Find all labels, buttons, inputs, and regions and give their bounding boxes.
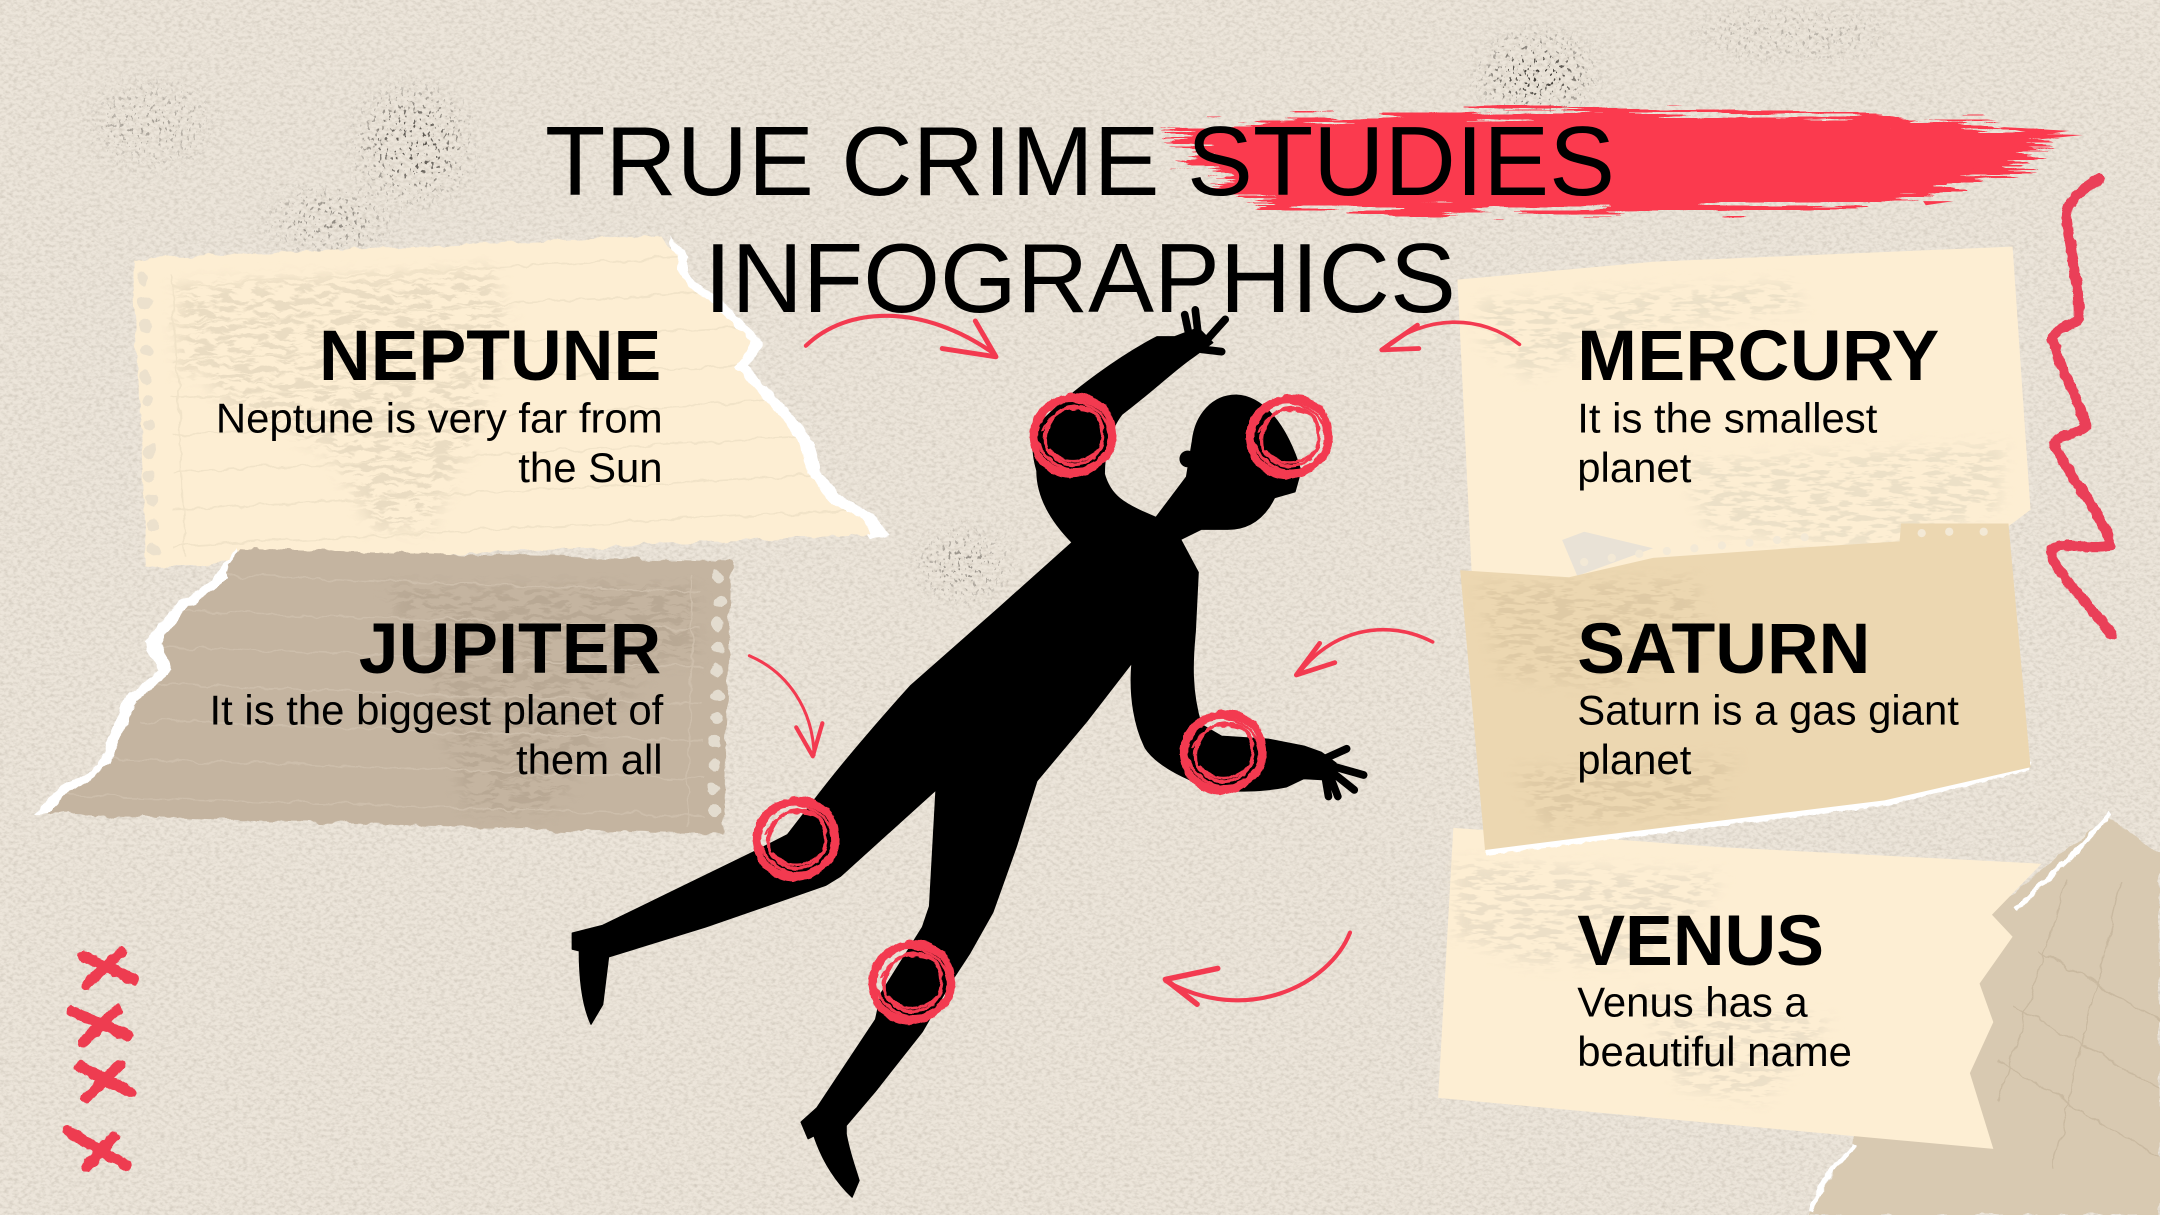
target ring: left elbow bbox=[1019, 383, 1128, 488]
text: Neptune: the Sun bbox=[518, 444, 663, 491]
corner torn paper bbox=[1807, 813, 2160, 1215]
text: Jupiter bbox=[210, 609, 664, 783]
silhouette figure bbox=[572, 310, 1364, 1197]
title: TRUE CRIME STUDIES bbox=[545, 106, 1615, 216]
text: Venus bbox=[1577, 901, 1852, 1075]
text: Jupiter: JUPITER bbox=[359, 609, 661, 689]
target ring: left knee bbox=[742, 786, 851, 892]
text: Venus: Venus has a bbox=[1577, 979, 1808, 1026]
arrow: Mercury to head bbox=[1382, 322, 1519, 350]
text: Jupiter: them all bbox=[516, 736, 663, 783]
panel: Neptune note bbox=[132, 236, 889, 568]
brush stroke behind title bbox=[1160, 110, 2083, 212]
text: Jupiter: It is the biggest planet of bbox=[210, 687, 664, 734]
text: Mercury: MERCURY bbox=[1577, 316, 1940, 396]
title: INFOGRAPHICS bbox=[704, 223, 1456, 333]
panel: Saturn note bbox=[1460, 523, 2031, 855]
text: Mercury bbox=[1577, 316, 1940, 491]
arrow: Venus to knee bbox=[1165, 933, 1350, 1004]
panel: Jupiter note bbox=[34, 548, 731, 835]
arrow: Saturn to elbow bbox=[1296, 630, 1433, 675]
text: Saturn bbox=[1577, 609, 1959, 783]
text: Mercury: planet bbox=[1577, 444, 1692, 491]
arrow: Jupiter to knee bbox=[749, 656, 822, 756]
target ring: head bbox=[1235, 384, 1344, 489]
text: Saturn: SATURN bbox=[1577, 609, 1870, 689]
text: Mercury: It is the smallest bbox=[1577, 395, 1878, 442]
panel: Venus note bbox=[1438, 828, 2042, 1149]
text: Neptune: Neptune is very far from bbox=[216, 395, 663, 442]
text: Venus: beautiful name bbox=[1577, 1028, 1852, 1075]
red cross marks bbox=[68, 952, 134, 1167]
text: Saturn: planet bbox=[1577, 736, 1692, 783]
text: Neptune: NEPTUNE bbox=[319, 316, 661, 396]
red squiggle bbox=[2051, 179, 2112, 635]
title bbox=[545, 106, 1615, 333]
arrow: Neptune to arm bbox=[806, 316, 996, 357]
text: Saturn: Saturn is a gas giant bbox=[1577, 687, 1959, 734]
text: Venus: VENUS bbox=[1577, 901, 1824, 981]
target ring: right elbow bbox=[1169, 700, 1278, 805]
target ring: right knee bbox=[857, 930, 967, 1035]
text: Neptune bbox=[216, 316, 663, 491]
panel: Mercury note bbox=[1457, 247, 2031, 592]
